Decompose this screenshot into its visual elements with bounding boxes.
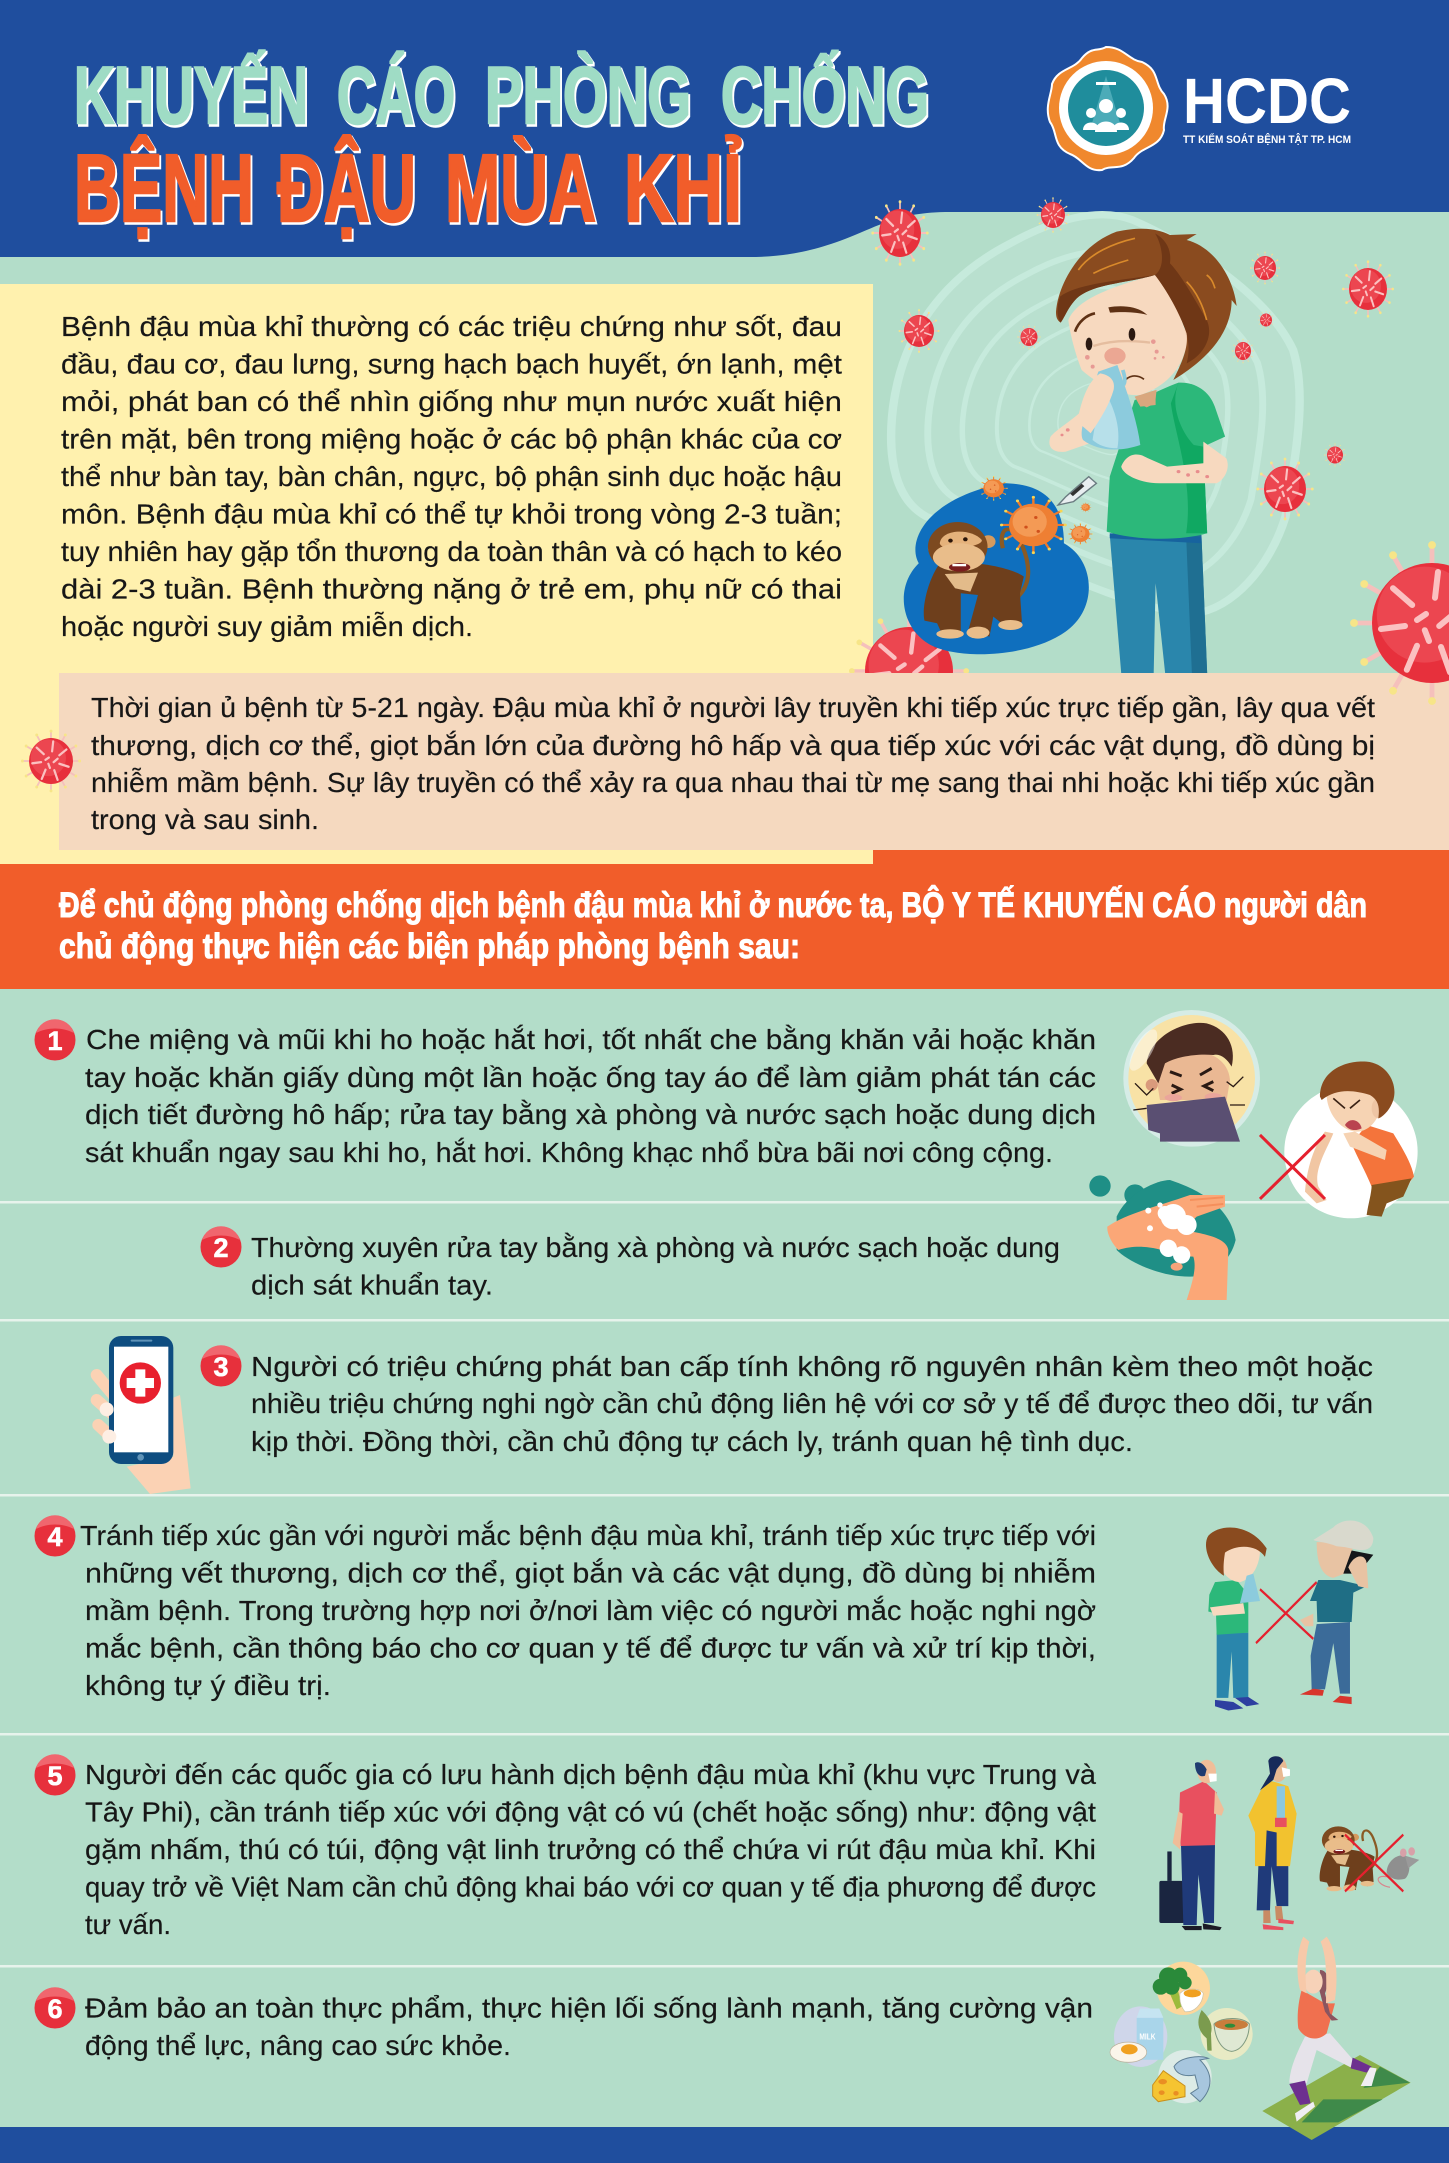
transmission paragraph: thương, dịch cơ thể, giọt bắn lớn của đường hô hấp và qua tiếp xúc với các vật dụng, đồ dùng bị xyxy=(91,730,1375,761)
item 4: avoid contact: Tránh tiếp xúc gần với người mắc bệnh đậu mùa khỉ, tránh tiếp xúc trực tiếp với xyxy=(80,1520,1096,1551)
item 5: travel advice: Người đến các quốc gia có lưu hành dịch bệnh đậu mùa khỉ (khu vực Trung và xyxy=(85,1759,1096,1790)
title xyxy=(74,50,930,244)
red cross xyxy=(1256,1582,1317,1643)
badge 3 xyxy=(200,1345,242,1386)
item 3: report symptoms: Người có triệu chứng phát ban cấp tính không rõ nguyên nhân kèm theo một hoặc xyxy=(251,1351,1373,1382)
red cross xyxy=(1345,1835,1403,1891)
item 5: travel advice: quay trở về Việt Nam cần chủ động khai báo với cơ quan y tế địa phương để được xyxy=(85,1872,1096,1902)
icon: yoga woman on mat xyxy=(1262,1937,1411,2140)
virus: large right xyxy=(1354,545,1449,701)
title line 1: CHỐNG xyxy=(721,50,929,141)
intro paragraph: mỏi, phát ban có thể nhìn giống như mụn nước xuất hiện xyxy=(61,386,842,417)
title line 1: KHUYẾN xyxy=(74,50,308,141)
item 5: travel advice: gặm nhấm, thú có túi, động vật linh trưởng có thể chứa vi rút đậu mùa khỉ. Khi xyxy=(85,1834,1096,1865)
intro paragraph xyxy=(61,311,842,642)
icon: red cross mark, item 1 xyxy=(1260,1135,1325,1199)
title line 2: MÙA xyxy=(446,137,598,244)
item 4: avoid contact xyxy=(34,1515,1096,1701)
intro paragraph: đầu, đau cơ, đau lưng, sưng hạch bạch huyết, ớn lạnh, mệt xyxy=(61,348,842,380)
logo emblem xyxy=(1048,47,1168,170)
man with suitcase xyxy=(1159,1760,1224,1930)
transmission paragraph xyxy=(91,692,1375,835)
monkey on blue blob xyxy=(904,477,1096,654)
title line 1: CHỐNG xyxy=(722,52,930,143)
item 1: cover mouth: sát khuẩn ngay sau khi ho, hắt hơi. Không khạc nhổ bừa bãi nơi công cộng. xyxy=(85,1137,1053,1168)
logo wordmark: HCDC xyxy=(1183,65,1351,137)
item 3: report symptoms xyxy=(200,1345,1373,1457)
band heading xyxy=(59,885,1367,966)
rat xyxy=(1378,1847,1419,1887)
boy body xyxy=(1107,383,1225,673)
band heading: chủ động thực hiện các biện pháp phòng bệnh sau: xyxy=(59,927,800,966)
title line 2: KHỈ xyxy=(624,134,742,242)
title line 1: KHUYẾN xyxy=(76,52,310,143)
item 1: cover mouth: tay hoặc khăn giấy dùng một lần hoặc ống tay áo để làm giảm phát tán các xyxy=(85,1062,1096,1093)
title line 2: BỆNH xyxy=(74,134,254,242)
title line 2: BỆNH xyxy=(76,136,256,244)
boy head xyxy=(1056,229,1237,407)
intro paragraph: trên mặt, bên trong miệng hoặc ở các bộ phận khác của cơ xyxy=(61,424,842,454)
virus clipped at box xyxy=(852,614,966,728)
item 4: avoid contact: không tự ý điều trị. xyxy=(85,1670,331,1701)
badge 5: 5 xyxy=(47,1761,63,1791)
badge 4: 4 xyxy=(47,1522,63,1552)
intro paragraph: môn. Bệnh đậu mùa khỉ có thể tự khỏi trong vòng 2-3 tuần; xyxy=(61,498,842,530)
icon: broccoli, soup, fish and cheese xyxy=(1153,1962,1253,2103)
icon: travellers and animals xyxy=(1159,1756,1419,1930)
background swirl xyxy=(891,215,1300,613)
badge 1: 1 xyxy=(47,1026,63,1056)
illustration: sick boy with viruses and monkey xyxy=(852,198,1393,728)
logo subtitle: TT KIỂM SOÁT BỆNH TẬT TP. HCM xyxy=(1183,133,1351,146)
header band xyxy=(0,0,1449,257)
badge 5 xyxy=(34,1754,76,1796)
boy hands and tissue xyxy=(1049,365,1228,483)
woman in yellow coat xyxy=(1248,1756,1297,1930)
panel: intro yellow box xyxy=(0,284,873,864)
small red viruses xyxy=(873,198,1393,519)
badge 6 xyxy=(34,1987,76,2028)
title line 2 xyxy=(74,134,744,244)
item 6: food safety and exercise xyxy=(34,1987,1093,2061)
item 1: cover mouth xyxy=(34,1019,1096,1168)
item 6: food safety and exercise: động thể lực, nâng cao sức khỏe. xyxy=(85,2030,511,2061)
icon: milk and egg: MILK xyxy=(1139,2032,1156,2042)
icon: coughing boy in white circle xyxy=(1284,1061,1418,1218)
title line 1 xyxy=(74,50,930,143)
item 2: wash hands xyxy=(200,1226,1060,1300)
badge 1 xyxy=(34,1019,76,1060)
icon: two people, no contact xyxy=(1206,1520,1373,1710)
intro paragraph: Bệnh đậu mùa khỉ thường có các triệu chứng như sốt, đau xyxy=(61,311,842,342)
panel: transmission peach box xyxy=(59,673,1449,850)
item 5: travel advice xyxy=(34,1754,1096,1940)
item 3: report symptoms: nhiều triệu chứng nghi ngờ cần chủ động liên hệ với cơ sở y tế để được theo dõi, tư vấn xyxy=(251,1388,1373,1419)
logo: HCDC xyxy=(1048,47,1351,170)
title line 1: CÁO xyxy=(338,53,456,143)
sick boy xyxy=(1206,1527,1267,1710)
item 5: travel advice: Tây Phi), cần tránh tiếp xúc với động vật có vú (chết hoặc sống) như: động vật xyxy=(85,1796,1096,1828)
man with cap xyxy=(1300,1520,1373,1704)
yoga mat xyxy=(1262,2055,1411,2140)
item 4: avoid contact: mắc bệnh, cần thông báo cho cơ quan y tế để được tư vấn và xử trí kịp thời, xyxy=(85,1632,1096,1664)
title line 2: KHỈ xyxy=(626,136,744,244)
item 3: report symptoms: kịp thời. Đồng thời, cần chủ động tự cách ly, tránh quan hệ tình dục. xyxy=(251,1426,1133,1457)
badge 3: 3 xyxy=(213,1352,229,1382)
transmission paragraph: nhiễm mầm bệnh. Sự lây truyền có thể xảy ra qua nhau thai từ mẹ sang thai nhi hoặc khi tiếp xúc gần xyxy=(91,767,1375,798)
item 2: wash hands: dịch sát khuẩn tay. xyxy=(251,1270,493,1300)
item 1: cover mouth: Che miệng và mũi khi ho hoặc hắt hơi, tốt nhất che bằng khăn vải hoặc khăn xyxy=(86,1024,1096,1055)
item 2: wash hands: Thường xuyên rửa tay bằng xà phòng và nước sạch hoặc dung xyxy=(251,1232,1060,1263)
intro paragraph: dài 2-3 tuần. Bệnh thường nặng ở trẻ em, phụ nữ có thai xyxy=(61,574,842,604)
badge 2 xyxy=(200,1226,242,1268)
title line 2: ĐẬU xyxy=(278,136,418,244)
title line 2: MÙA xyxy=(445,135,596,242)
badge 2: 2 xyxy=(213,1233,229,1263)
monkey small xyxy=(1320,1826,1377,1891)
item 6: food safety and exercise: Đảm bảo an toàn thực phẩm, thực hiện lối sống lành mạnh, tăng cường vận xyxy=(85,1992,1093,2024)
icon: sneezing boy in bubble xyxy=(1123,1010,1260,1147)
intro paragraph: thể như bàn tay, bàn chân, ngực, bộ phận sinh dục hoặc hậu xyxy=(61,461,842,492)
woman xyxy=(1289,1937,1377,2122)
title line 1: PHÒNG xyxy=(485,50,691,141)
footer band xyxy=(0,2127,1449,2163)
icon: phone with medical cross xyxy=(97,1336,191,1494)
icon: milk and egg xyxy=(1110,2006,1167,2067)
badge 6: 6 xyxy=(47,1994,63,2024)
item 5: travel advice: tư vấn. xyxy=(85,1909,171,1940)
badge 4 xyxy=(34,1515,76,1556)
title line 1: PHÒNG xyxy=(486,52,692,143)
transmission paragraph: Thời gian ủ bệnh từ 5-21 ngày. Đậu mùa khỉ ở người lây truyền khi tiếp xúc trực tiếp gần, lây qua vết xyxy=(91,692,1375,723)
intro paragraph: hoặc người suy giảm miễn dịch. xyxy=(61,611,473,642)
icon: washing hands xyxy=(1089,1175,1236,1300)
transmission paragraph: trong và sau sinh. xyxy=(91,804,319,835)
panel: orange recommendation band xyxy=(0,850,1449,989)
intro paragraph: tuy nhiên hay gặp tổn thương da toàn thân và có hạch to kéo xyxy=(61,536,842,567)
item 4: avoid contact: mầm bệnh. Trong trường hợp nơi ở/nơi làm việc có người mắc hoặc nghi ngờ xyxy=(85,1595,1096,1626)
item 1: cover mouth: dịch tiết đường hô hấp; rửa tay bằng xà phòng và nước sạch hoặc dung dịch xyxy=(85,1099,1096,1130)
virus: small left on box edge xyxy=(22,731,80,791)
title line 2: ĐẬU xyxy=(277,134,416,242)
item 4: avoid contact: những vết thương, dịch cơ thể, giọt bắn và các vật dụng, đồ dùng bị nhiễm xyxy=(85,1558,1096,1588)
title line 1: CÁO xyxy=(337,51,455,141)
